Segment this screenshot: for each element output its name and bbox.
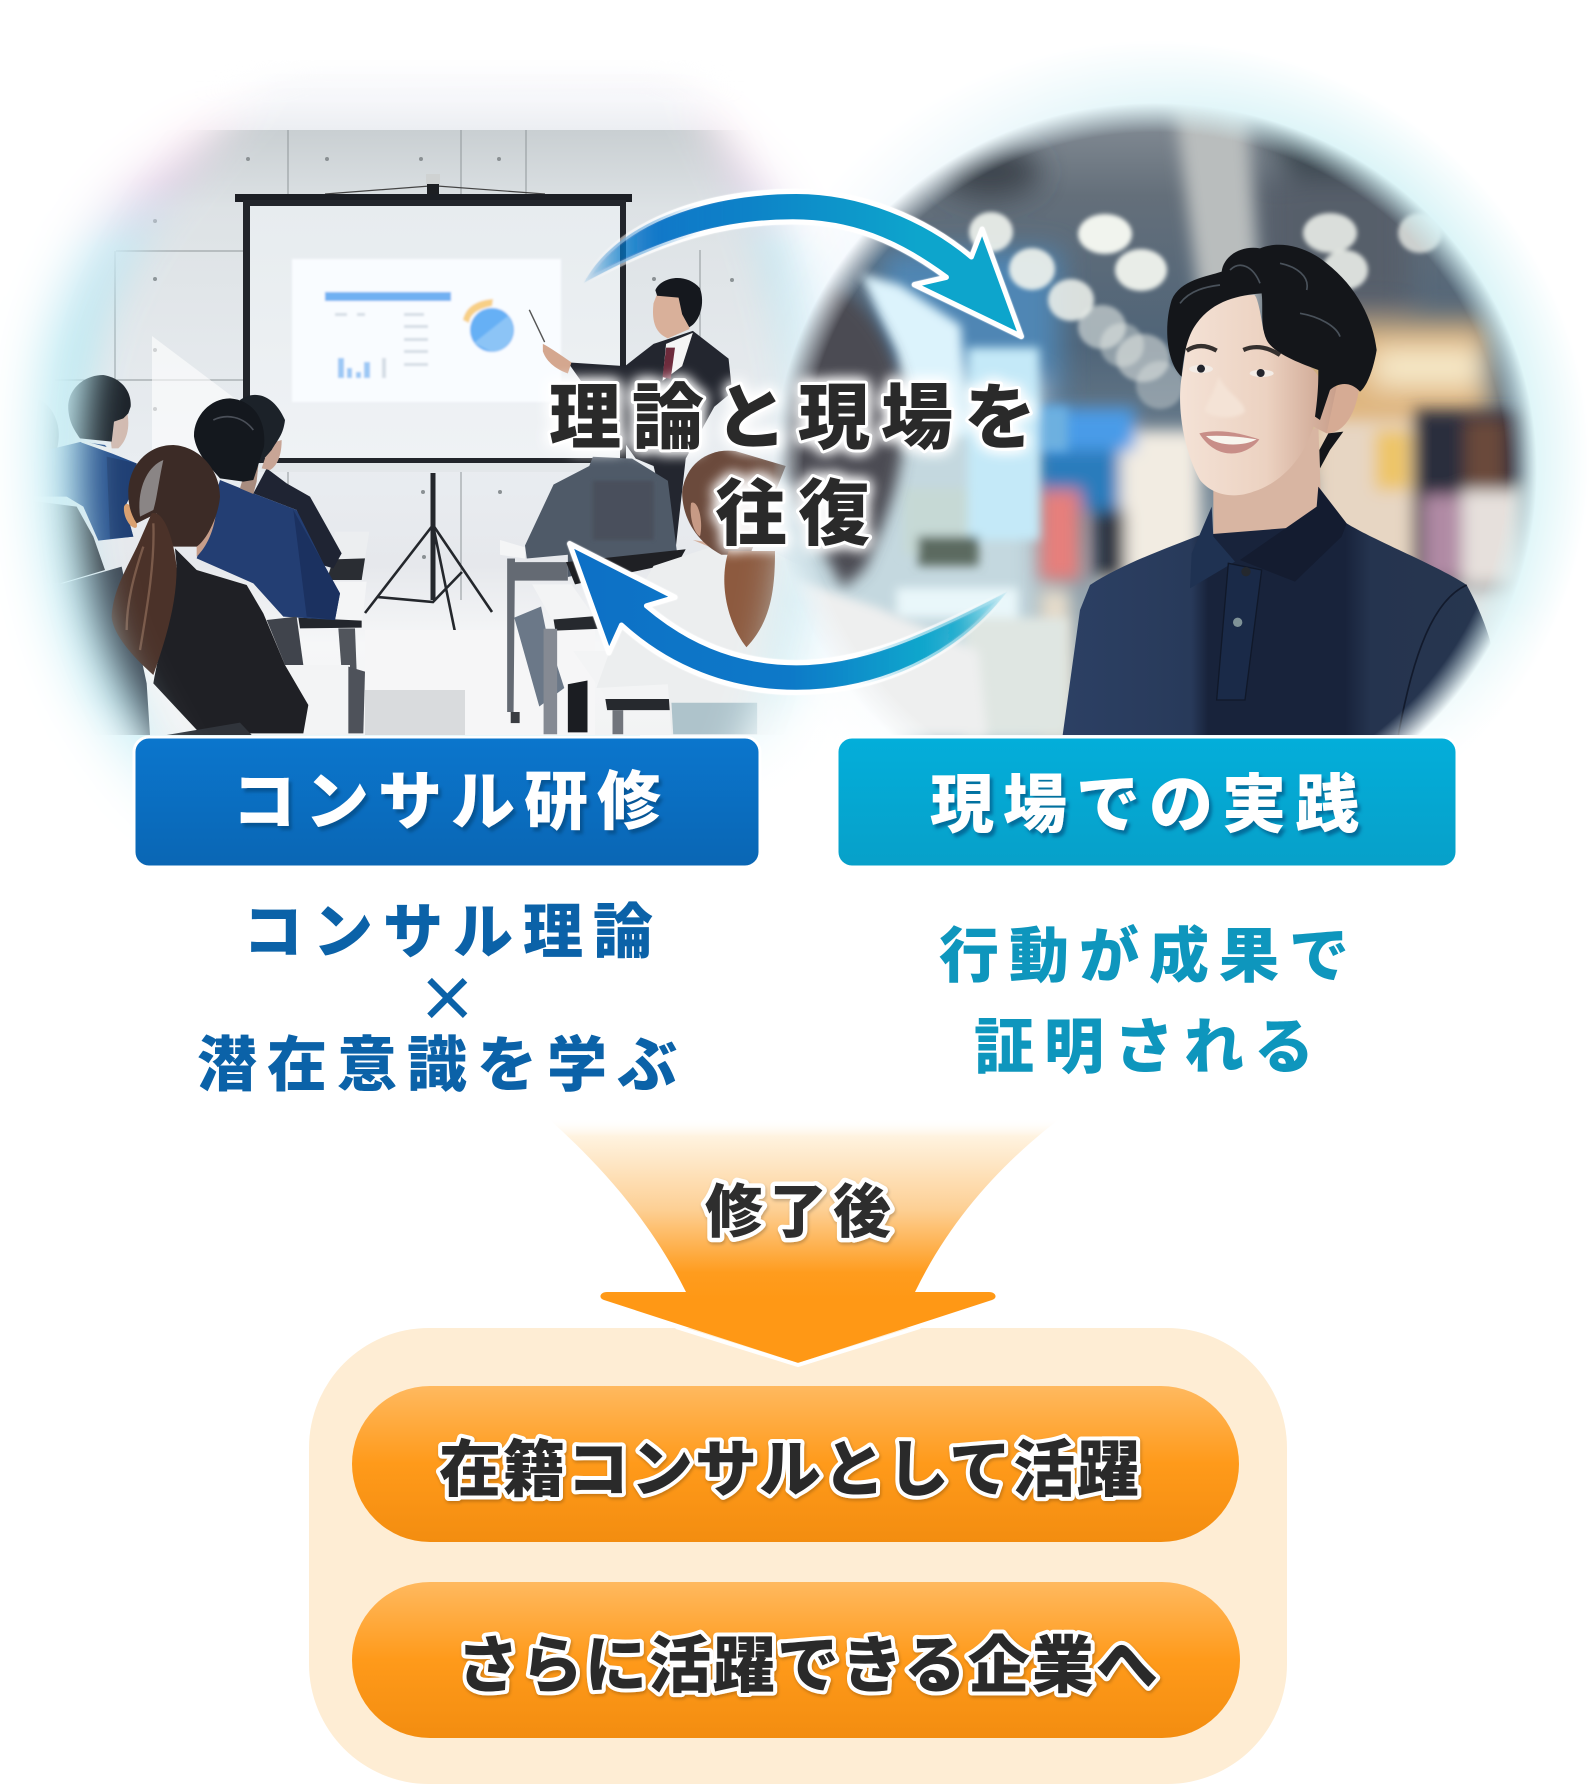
projected slide [292,259,561,402]
chair [267,617,303,665]
sleeve seam [1398,585,1467,735]
wall [70,130,788,735]
face [1180,295,1337,495]
centre caption [549,379,1047,555]
pale left wall [740,380,1040,735]
photo: consulting seminar room [50,92,790,735]
collar right [1240,487,1347,582]
neck [1213,427,1322,560]
projection screen [235,194,634,472]
light wedge on wall [152,336,235,456]
hair [1167,245,1377,420]
ear [1320,381,1359,433]
chair back [671,703,757,734]
cycle arrow: top, field direction [584,191,1021,336]
eyebrows [1187,346,1280,355]
staff member, in zoom coordinates [1063,245,1491,735]
table 2 [532,584,600,629]
attendee in grey suit [514,457,686,706]
centre of seminar room, in zoom coordinates [500,278,893,734]
centre caption: 理論と現場を [549,379,1047,459]
back hair at neck [1319,432,1343,468]
collar [1190,507,1235,588]
eyes [1189,365,1274,377]
text block: field practice description: 行動が成果で [939,923,1359,990]
far-left chair [50,504,105,583]
blue left wall [880,250,1060,400]
camera [325,174,545,194]
wall bolts [153,157,734,559]
placket [1217,563,1262,700]
wall panels [55,130,700,600]
tripod [365,473,492,632]
polo shirt [1063,523,1491,735]
text block: consulting training description: コンサル理論 [243,899,663,966]
arrow label: 修了後 [705,1180,897,1245]
mouth [1199,431,1259,453]
bottom chair [167,723,252,735]
audience on the left, in zoom coordinates [50,375,366,735]
floor [453,630,456,632]
text block: consulting training description [197,899,687,1099]
foreground woman blurred hair [779,277,904,588]
far-left attendee [60,566,150,735]
halo fade below the photos [640,600,1590,900]
hair highlights [1180,263,1340,337]
photo: retail floor with smiling staff member [740,60,1570,740]
text block: field practice description [939,923,1359,1081]
table and wheel [511,712,520,723]
table 3 [335,582,366,594]
pill: move up to a stronger company [352,1582,1240,1738]
woman with ponytail [112,445,308,733]
foreground woman blurred jacket [786,577,987,736]
panel: consulting training label: コンサル研修 [232,766,670,838]
ceiling [226,92,710,130]
centre caption: 往復 [715,475,881,555]
nose [1205,377,1245,417]
attendee 1 [50,375,137,541]
bokeh ceiling lights [969,212,1442,409]
text block: field practice description: 証明される [974,1014,1324,1081]
attendee 3 [240,395,342,568]
front table [232,665,350,733]
attendee 2 [194,398,340,620]
dark ceiling patches [940,146,1040,198]
ceiling column [1173,90,1262,322]
buttons [1233,567,1251,627]
background halo: right circle [783,60,1576,736]
table 3 [573,651,671,699]
text block: consulting training description: × [421,948,474,1048]
warm ceiling light [1300,322,1490,472]
panel: outcomes background [309,1328,1287,1784]
panel: field practice label [837,737,1457,867]
back table [328,532,369,567]
panel: field practice label: 現場での実践 [930,769,1368,841]
pill: active as registered consultant: 在籍コンサルとして活躍 [439,1436,1141,1505]
arrow: after completion [550,1120,1058,1365]
pill: move up to a stronger company: さらに活躍できる企業へ [457,1632,1160,1701]
background halo: left circle [11,122,826,790]
presenter [529,278,732,555]
text block: consulting training description: 潜在意識を学ぶ [197,1032,687,1099]
panel: consulting training label [134,737,760,867]
pill: active as registered consultant [352,1386,1239,1542]
blurred foreground woman and display panels, in zoom coordinates [779,274,1068,736]
table left of grey suit man [500,540,525,558]
lower store shelves [1040,408,1528,735]
cycle arrow: bottom, seminar direction [570,544,1007,692]
woman in white jacket [596,451,893,734]
blurred store interior [740,60,1570,740]
